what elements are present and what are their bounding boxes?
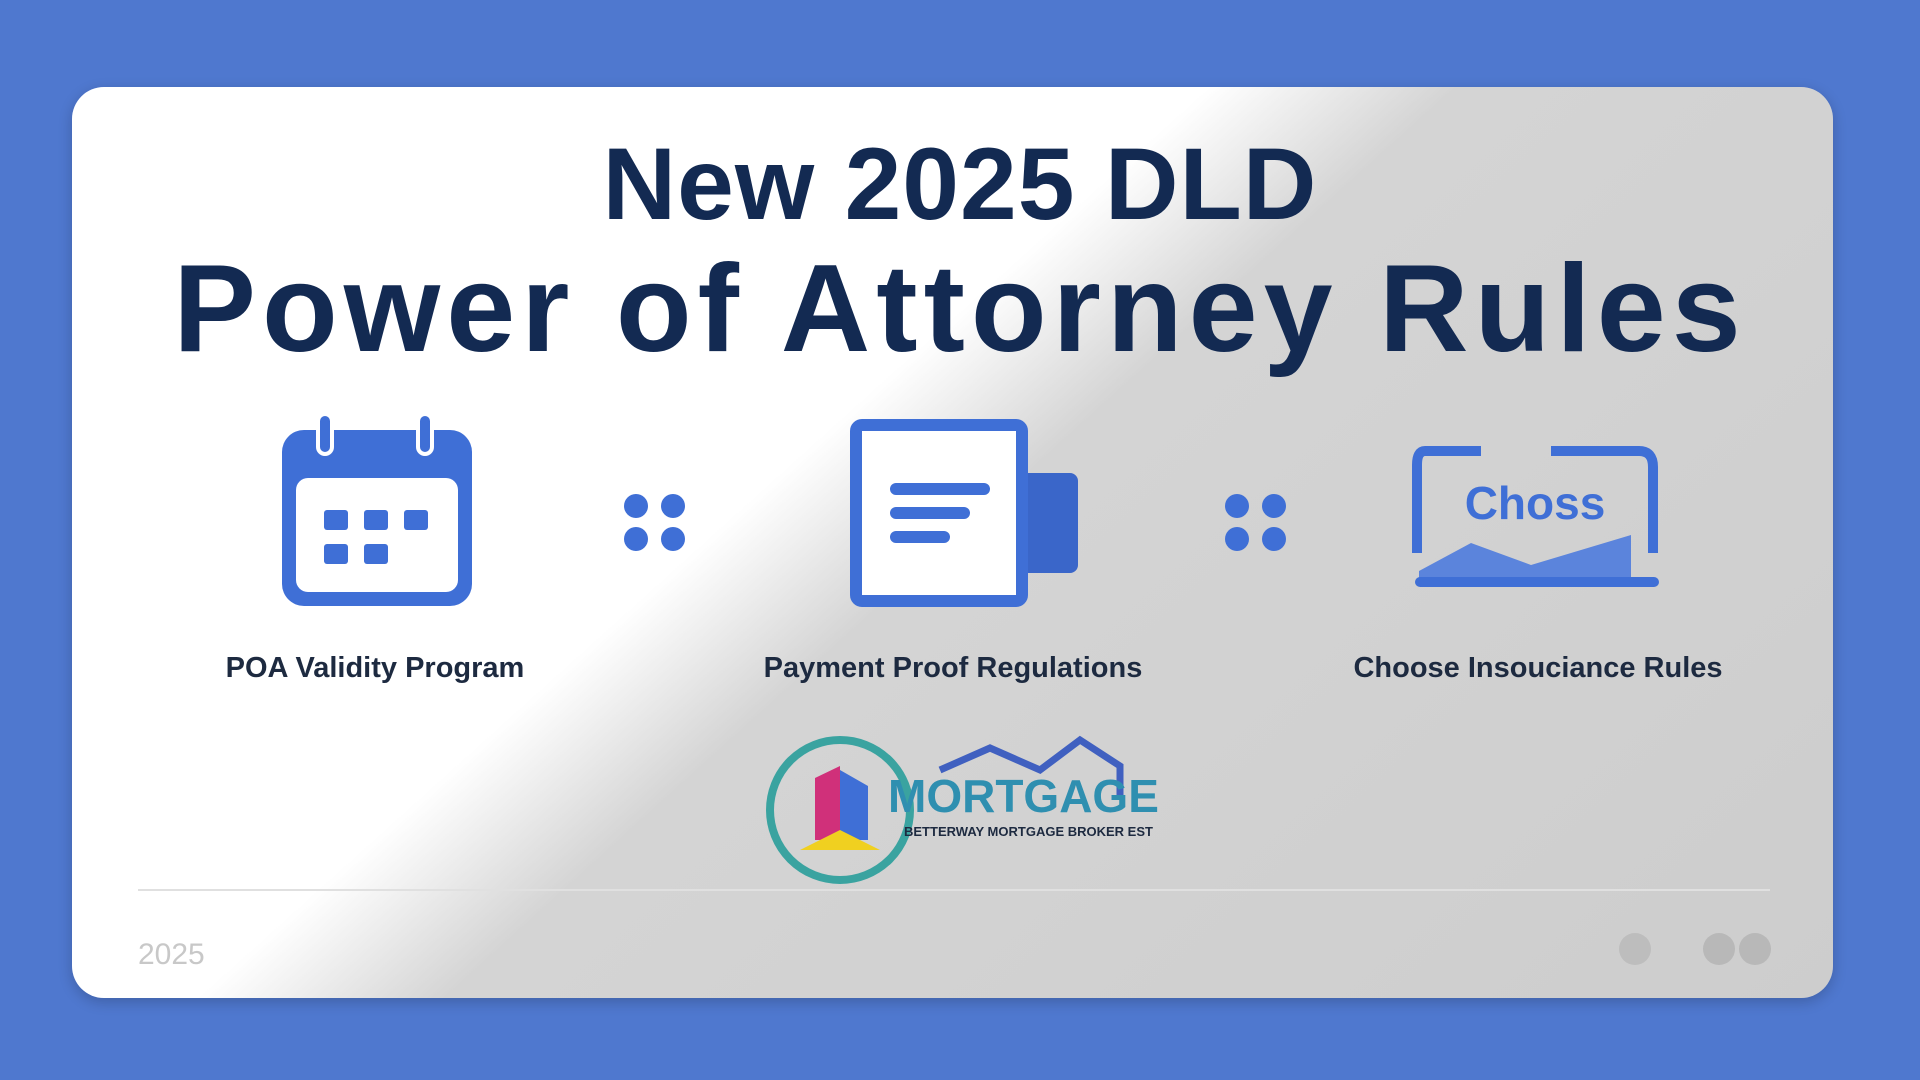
icon: dots 2: [1225, 494, 1286, 551]
icon: chart board: [1412, 446, 1659, 587]
card panel: [72, 87, 1833, 998]
title line 2: Power of Attorney Rules: [173, 240, 1747, 378]
icon: document: [850, 419, 1078, 607]
divider: [138, 889, 1770, 891]
footer year: 2025: [138, 938, 205, 971]
icon: chart board: Choss: [1465, 477, 1605, 529]
logo: [766, 736, 1159, 884]
label: payment: Payment Proof Regulations: [764, 652, 1142, 684]
logo: MORTGAGE: [888, 770, 1159, 822]
logo: BETTERWAY MORTGAGE BROKER EST: [904, 824, 1153, 839]
icon: dots 1: [624, 494, 685, 551]
label: POA: POA Validity Program: [226, 652, 524, 684]
title line 1: New 2025 DLD: [603, 127, 1317, 241]
icon: calendar: [282, 416, 472, 606]
footer dots: [1619, 933, 1771, 965]
label: choose: Choose Insouciance Rules: [1353, 652, 1723, 684]
